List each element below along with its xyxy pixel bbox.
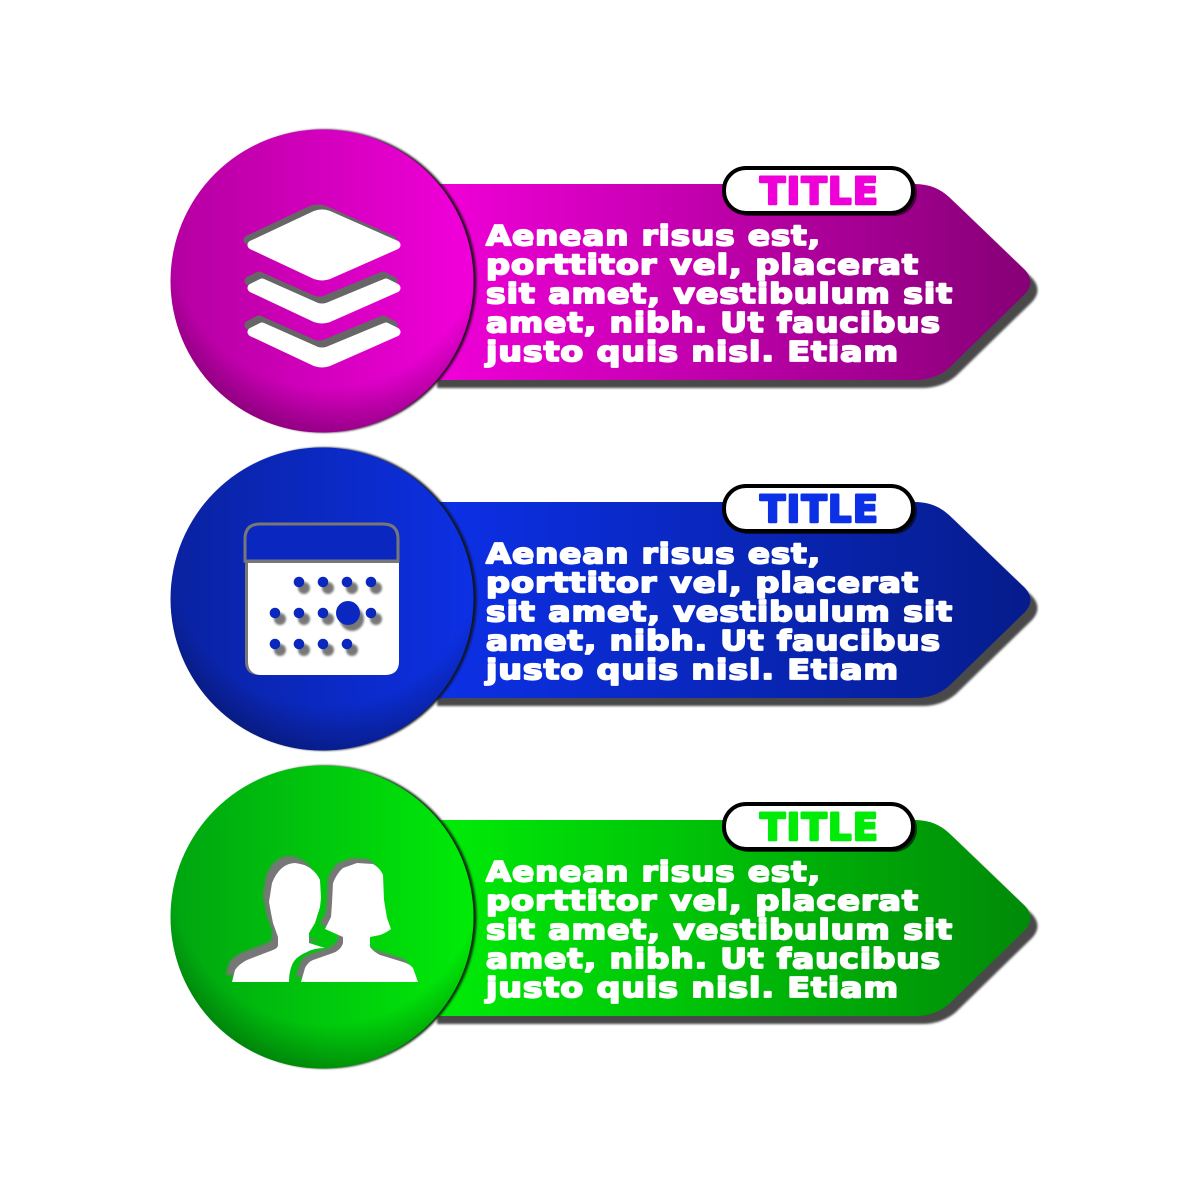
circle badge <box>170 130 476 432</box>
circle badge <box>170 448 476 750</box>
body text: justo quis nisl. Etiam <box>485 335 899 368</box>
title pill: TITLE <box>760 488 878 531</box>
title pill: TITLE <box>760 806 878 849</box>
body text: Aenean risus est, <box>486 219 821 252</box>
title pill <box>724 804 917 852</box>
arrow banner <box>430 502 1038 706</box>
row 2: blue calendar panel <box>170 448 1038 750</box>
row 1: magenta layers panel <box>170 130 1038 432</box>
icon: two people <box>226 856 418 982</box>
body text: sit amet, vestibulum sit <box>486 913 953 946</box>
body text: porttitor vel, placerat <box>486 884 919 917</box>
title pill <box>724 486 917 534</box>
body text: Aenean risus est, <box>486 855 821 888</box>
body text: porttitor vel, placerat <box>486 566 919 599</box>
title pill: TITLE <box>760 170 878 213</box>
icon: layers <box>248 209 396 363</box>
body text: amet, nibh. Ut faucibus <box>486 306 941 339</box>
body text: sit amet, vestibulum sit <box>486 595 953 628</box>
icon: calendar <box>245 524 399 675</box>
arrow banner <box>430 820 1038 1024</box>
arrow banner <box>430 184 1038 388</box>
title pill <box>724 168 917 216</box>
body text: porttitor vel, placerat <box>486 248 919 281</box>
body text: amet, nibh. Ut faucibus <box>486 942 941 975</box>
row 3: green people panel <box>170 766 1038 1068</box>
body text: Aenean risus est, <box>486 537 821 570</box>
body text: justo quis nisl. Etiam <box>485 971 899 1004</box>
circle badge <box>170 766 476 1068</box>
body text: amet, nibh. Ut faucibus <box>486 624 941 657</box>
body text: sit amet, vestibulum sit <box>486 277 953 310</box>
body text: justo quis nisl. Etiam <box>485 653 899 686</box>
